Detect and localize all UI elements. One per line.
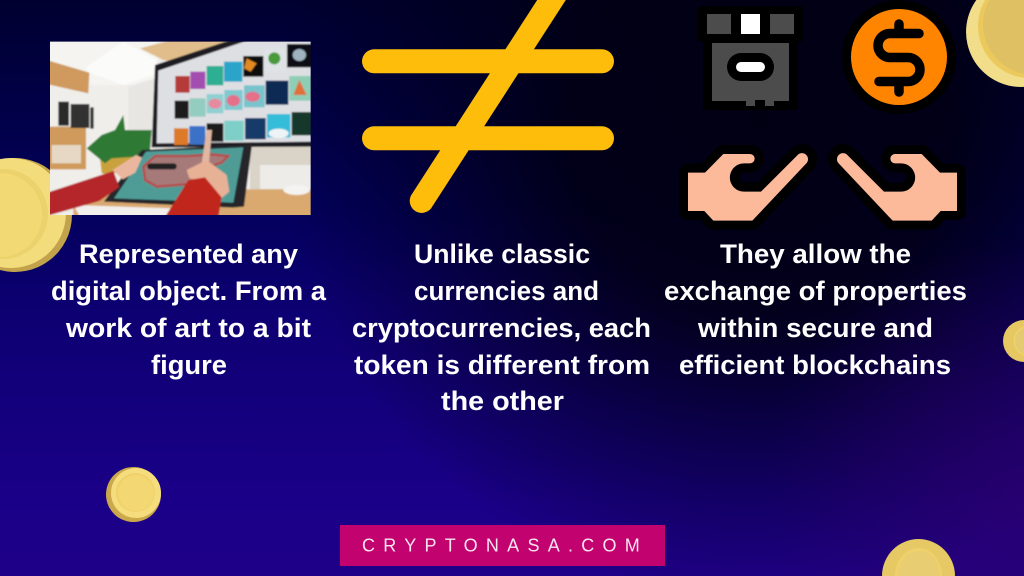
text block: digital object	[51, 239, 327, 380]
icon: microchip	[698, 6, 803, 110]
photo: person drawing pixel art on a tablet in front of a monitor	[48, 40, 313, 217]
icon: right hand	[837, 153, 957, 221]
text block: unique tokens: cryptocurrencies, each	[352, 313, 651, 343]
text block: digital object: figure	[151, 350, 227, 380]
text block: blockchain exchange	[664, 239, 967, 380]
text block: unique tokens: token is different from	[354, 350, 650, 380]
text block: blockchain exchange: within secure and	[697, 313, 933, 343]
coin: left	[0, 158, 72, 272]
coin: bottom left	[106, 467, 161, 522]
text block: unique tokens: currencies and	[414, 276, 599, 306]
not-equal sign	[362, 0, 614, 213]
text block: unique tokens: the other	[441, 386, 565, 416]
website badge: CRYPTONASA.COM	[362, 536, 648, 556]
text block: unique tokens: Unlike classic	[414, 239, 590, 269]
icon: left hand	[688, 153, 808, 221]
icon: dollar coin	[842, 0, 956, 114]
text block: blockchain exchange: exchange of properties	[664, 276, 967, 306]
text block: unique tokens	[352, 239, 651, 416]
text block: blockchain exchange: They allow the	[720, 239, 911, 269]
text block: digital object: Represented any	[79, 239, 298, 269]
text block: blockchain exchange: efficient blockchains	[679, 350, 951, 380]
coin: top right	[966, 0, 1024, 87]
coin: middle right	[1003, 320, 1024, 362]
coin: bottom right	[882, 539, 955, 576]
text block: digital object: digital object. From a	[51, 276, 327, 306]
website badge	[340, 525, 665, 566]
text block: digital object: work of art to a bit	[65, 313, 311, 343]
